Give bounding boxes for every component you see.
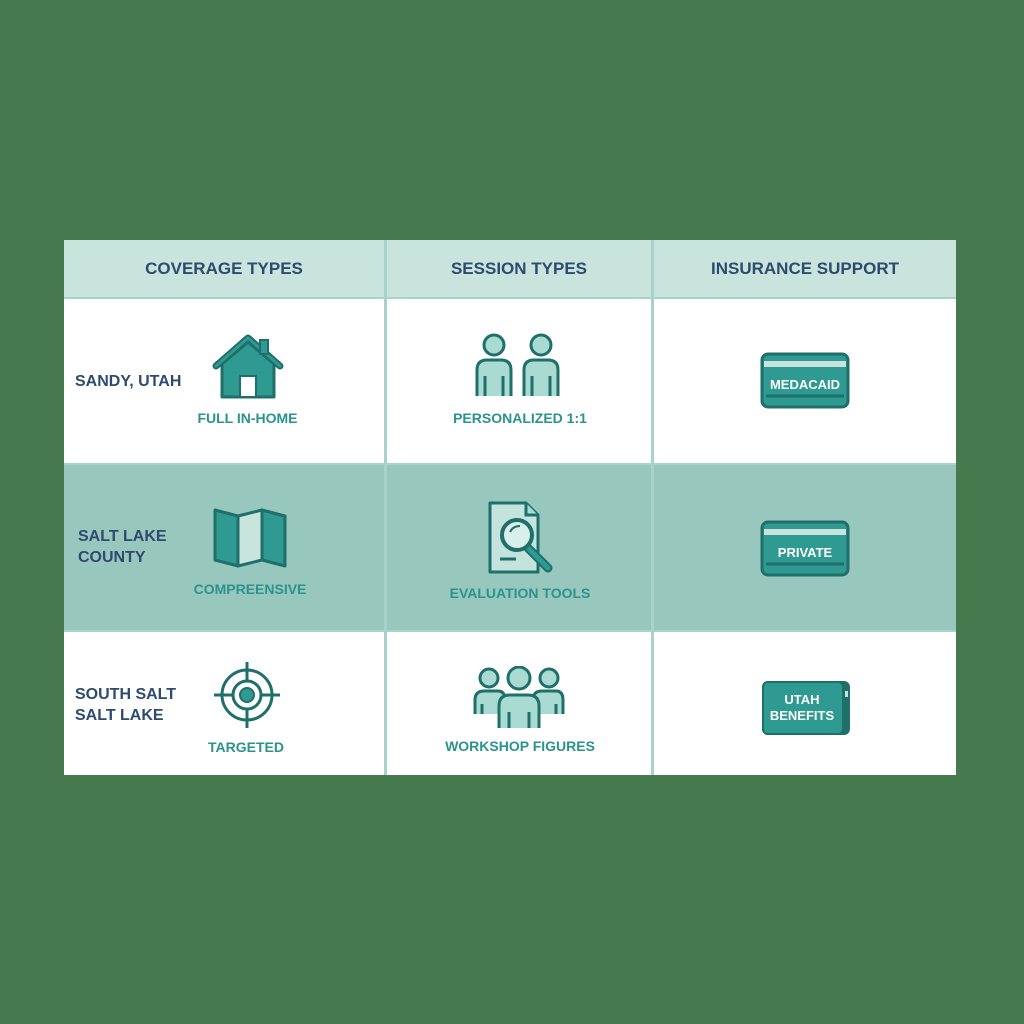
icon: private card [760, 520, 850, 576]
icon: utah benefits card: UTAH [784, 692, 820, 707]
row2 location: Salt Lake County [78, 528, 167, 566]
header: coverage types: COVERAGE TYPES [145, 258, 303, 278]
row1 location: Sandy, Utah: SANDY, UTAH [75, 373, 181, 390]
icon: private card: PRIVATE [778, 545, 833, 560]
icon: utah benefits card: BENEFITS [770, 708, 834, 723]
row3 location: South Salt Lake: SOUTH SALT [75, 686, 176, 703]
row2 location: Salt Lake County: COUNTY [78, 549, 146, 566]
icon: two persons [476, 334, 560, 396]
icon: target [214, 662, 280, 728]
row2 location: Salt Lake County: SALT LAKE [78, 528, 167, 545]
icon: house [212, 334, 284, 398]
icon: medicaid card: MEDACAID [770, 377, 840, 392]
label: personalized 1:1: PERSONALIZED 1:1 [453, 410, 587, 426]
table [64, 240, 956, 775]
label: workshop figures: WORKSHOP FIGURES [445, 738, 595, 754]
header: insurance support [654, 240, 956, 297]
label: targeted: TARGETED [208, 739, 284, 755]
icon: map [214, 508, 286, 568]
icon: medicaid card [760, 352, 850, 408]
label: compreensive: COMPREENSIVE [194, 581, 306, 597]
header: insurance support: INSURANCE SUPPORT [711, 258, 899, 278]
header: coverage types [64, 240, 384, 297]
header: session types [387, 240, 651, 297]
icon: evaluation document with magnifier [488, 502, 552, 574]
row3 location: South Salt Lake: SALT LAKE [75, 707, 164, 724]
label: full in-home: FULL IN-HOME [197, 410, 298, 426]
header: session types: SESSION TYPES [451, 258, 587, 278]
icon: utah benefits card [762, 681, 850, 735]
label: evaluation tools: EVALUATION TOOLS [450, 585, 590, 601]
icon: workshop group [474, 666, 564, 728]
row3 location: South Salt Lake [75, 686, 176, 724]
